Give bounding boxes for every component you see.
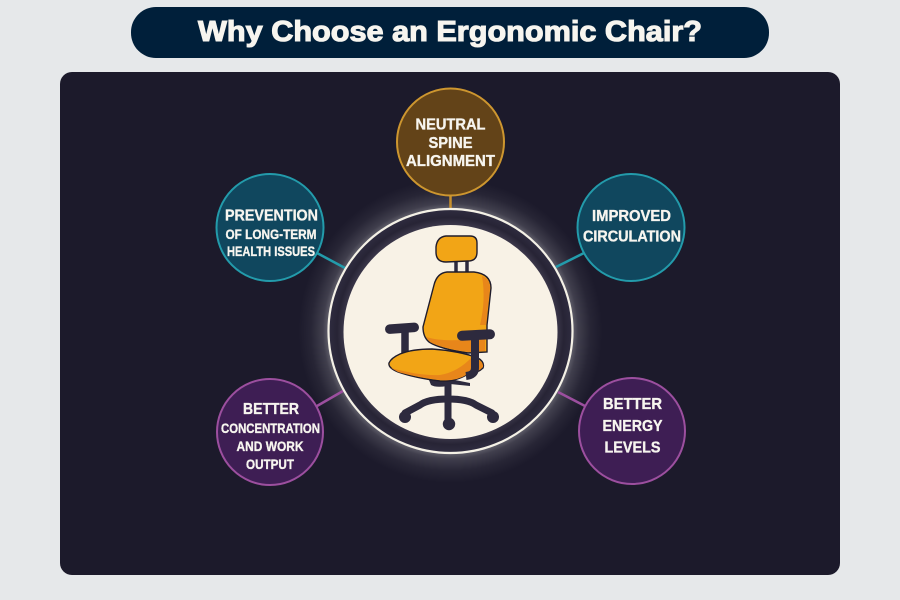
node: neutral spine alignment: NEUTRAL: [416, 116, 486, 134]
node: prevention of long-term health issues: OF LONG-TERM: [226, 226, 316, 242]
node: neutral spine alignment: ALIGNMENT: [406, 153, 496, 170]
title banner: [131, 7, 769, 58]
headrest posts: [456, 258, 467, 275]
node: neutral spine alignment: SPINE: [428, 135, 472, 152]
base: [405, 382, 492, 422]
central glow: [298, 179, 602, 483]
connector: circulation: [556, 253, 584, 267]
node: better concentration and work output: [217, 379, 323, 485]
node: prevention of long-term health issues: HEALTH ISSUES: [227, 243, 315, 259]
backrest shading: [426, 276, 490, 352]
node: better concentration and work output: OUTPUT: [246, 456, 294, 472]
icon: ergonomic chair: [385, 236, 499, 430]
connector: concentration: [317, 391, 343, 406]
node: better energy levels: BETTER: [603, 396, 662, 413]
central medallion: [328, 209, 572, 453]
node: better concentration and work output: AND WORK: [236, 438, 304, 454]
mechanism: [429, 379, 470, 387]
connector: spine: [449, 194, 452, 212]
node: neutral spine alignment: [397, 88, 504, 196]
node: better concentration and work output: BETTER: [243, 401, 299, 418]
panel: dark background: [60, 72, 840, 575]
backrest: [423, 272, 491, 353]
node: better energy levels: ENERGY: [602, 418, 663, 435]
right armrest: [457, 329, 495, 376]
node: improved circulation: [578, 174, 684, 281]
node: prevention of long-term health issues: [216, 174, 324, 281]
node: improved circulation: IMPROVED: [592, 208, 671, 225]
connector: energy: [558, 392, 585, 406]
connector: prevention: [317, 253, 345, 268]
node: better energy levels: LEVELS: [604, 440, 661, 456]
headrest: [436, 236, 477, 262]
casters: [399, 411, 499, 430]
title: Why Choose an Ergonomic Chair?: [198, 16, 702, 48]
left armrest: [385, 322, 419, 353]
node: better energy levels: [579, 378, 685, 484]
node: improved circulation: CIRCULATION: [583, 228, 681, 246]
seat: [389, 349, 483, 381]
seat shading: [391, 357, 483, 380]
node: prevention of long-term health issues: PREVENTION: [225, 208, 318, 224]
node: better concentration and work output: CONCENTRATION: [221, 420, 320, 436]
